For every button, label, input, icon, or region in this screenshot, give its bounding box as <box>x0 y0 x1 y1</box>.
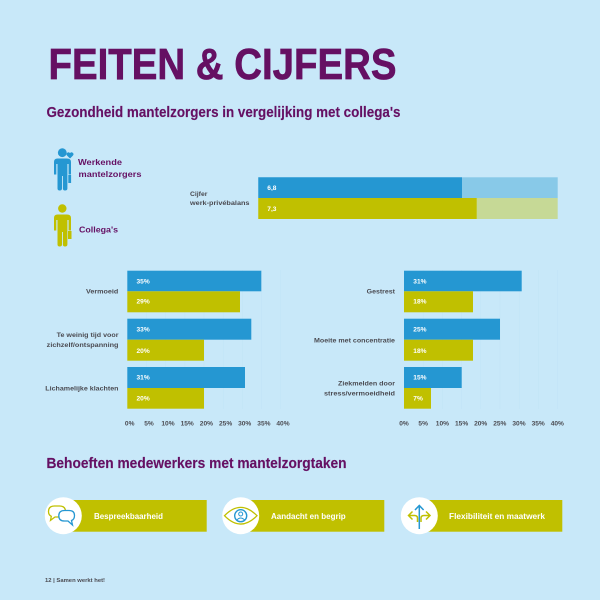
chart: left bar chart <box>45 270 290 428</box>
heading: needs of employees: Behoeften medewerkers met mantelzorgtaken <box>46 456 346 472</box>
category: Gestrest: Gestrest <box>367 289 396 296</box>
legend label: working caregivers: Werkende <box>78 157 122 167</box>
category: Vermoeid <box>86 271 261 312</box>
chart: work-life balance score <box>189 177 558 219</box>
category: Lichamelijke klachten <box>45 367 245 409</box>
x axis labels: 35% <box>257 421 271 428</box>
category: Moeite met concentratie: 25% <box>413 327 427 334</box>
category: Ziekmelden: 15% <box>413 375 427 382</box>
category: Moeite met concentratie <box>314 319 500 361</box>
bar: colleagues 7,3 <box>258 198 477 219</box>
legend label: colleagues: Collega's <box>79 225 118 235</box>
category: Ziekmelden: stress/vermoeidheid <box>324 391 395 398</box>
legend label: working caregivers <box>78 157 142 179</box>
x axis labels <box>399 421 564 428</box>
category: Ziekmelden: Ziekmelden door <box>338 381 395 388</box>
icon: blue person with heart <box>54 148 73 190</box>
x axis labels: 15% <box>455 421 468 428</box>
x axis labels: 35% <box>532 421 545 428</box>
footer: 12 | Samen werkt het! <box>45 578 105 584</box>
banner: Bespreekbaarheid <box>45 497 207 534</box>
category: Te weinig tijd: zichzelf/ontspanning <box>47 342 119 349</box>
x axis labels: 10% <box>161 421 175 428</box>
category: Vermoeid: 35% <box>136 279 150 286</box>
icon: three-way arrows <box>408 506 430 529</box>
category: Te weinig tijd <box>47 319 251 361</box>
bar: caregivers 6,8: 6,8 <box>267 185 277 192</box>
x axis labels: 40% <box>551 421 564 428</box>
x axis labels: 25% <box>219 421 232 428</box>
category: Moeite met concentratie: 18% <box>413 348 427 355</box>
category: Gestrest <box>367 271 522 312</box>
category: Lichamelijke klachten: 31% <box>136 375 150 382</box>
category: Te weinig tijd: 33% <box>136 327 150 334</box>
banner label: Aandacht en begrip <box>271 512 346 521</box>
category: Moeite met concentratie: Moeite met concentratie <box>314 338 395 345</box>
icon: green person <box>54 204 72 246</box>
x axis labels: 20% <box>200 421 213 428</box>
icon: speech bubbles <box>48 506 74 525</box>
category: Gestrest: 31% <box>413 279 427 286</box>
category: Te weinig tijd: 20% <box>136 348 150 355</box>
axis label: Cijfer <box>190 191 208 198</box>
banner: Aandacht en begrip <box>222 497 384 534</box>
subtitle: health comparison: Gezondheid mantelzorgers in vergelijking met collega's <box>46 105 400 121</box>
x axis labels: 30% <box>512 421 526 428</box>
category: Vermoeid: Vermoeid <box>86 289 118 296</box>
x axis labels: 25% <box>493 421 507 428</box>
legend label: working caregivers: mantelzorgers <box>78 169 142 179</box>
x axis labels: 0% <box>399 421 409 428</box>
category: Ziekmelden <box>324 367 462 409</box>
title: FEITEN & CIJFERS <box>48 40 396 89</box>
banner label: Flexibiliteit en maatwerk <box>449 512 546 521</box>
axis label <box>189 191 250 207</box>
category: Lichamelijke klachten: 20% <box>136 396 150 403</box>
x axis labels: 5% <box>418 421 428 428</box>
legend <box>54 148 142 246</box>
axis label: werk-privébalans <box>189 200 250 207</box>
banner label: Bespreekbaarheid <box>94 512 163 521</box>
x axis labels: 0% <box>125 421 135 428</box>
category: Ziekmelden: 7% <box>413 396 423 403</box>
category: Gestrest: 18% <box>413 299 427 306</box>
icon: eye with person <box>224 507 257 524</box>
bar: caregivers 6,8 <box>258 177 462 198</box>
chart: right bar chart <box>314 270 564 428</box>
x axis labels: 40% <box>276 421 290 428</box>
x axis labels: 15% <box>181 421 194 428</box>
x axis labels: 30% <box>238 421 251 428</box>
banner: Flexibiliteit en maatwerk <box>401 497 562 534</box>
x axis labels: 5% <box>144 421 154 428</box>
category: Lichamelijke klachten: Lichamelijke klachten <box>45 386 118 393</box>
category: Te weinig tijd: Te weinig tijd voor <box>57 332 119 339</box>
x axis labels: 20% <box>474 421 487 428</box>
x axis labels: 10% <box>436 421 449 428</box>
category: Vermoeid: 29% <box>136 299 150 306</box>
x axis labels <box>125 421 290 428</box>
bar: colleagues 7,3: 7,3 <box>267 206 277 213</box>
